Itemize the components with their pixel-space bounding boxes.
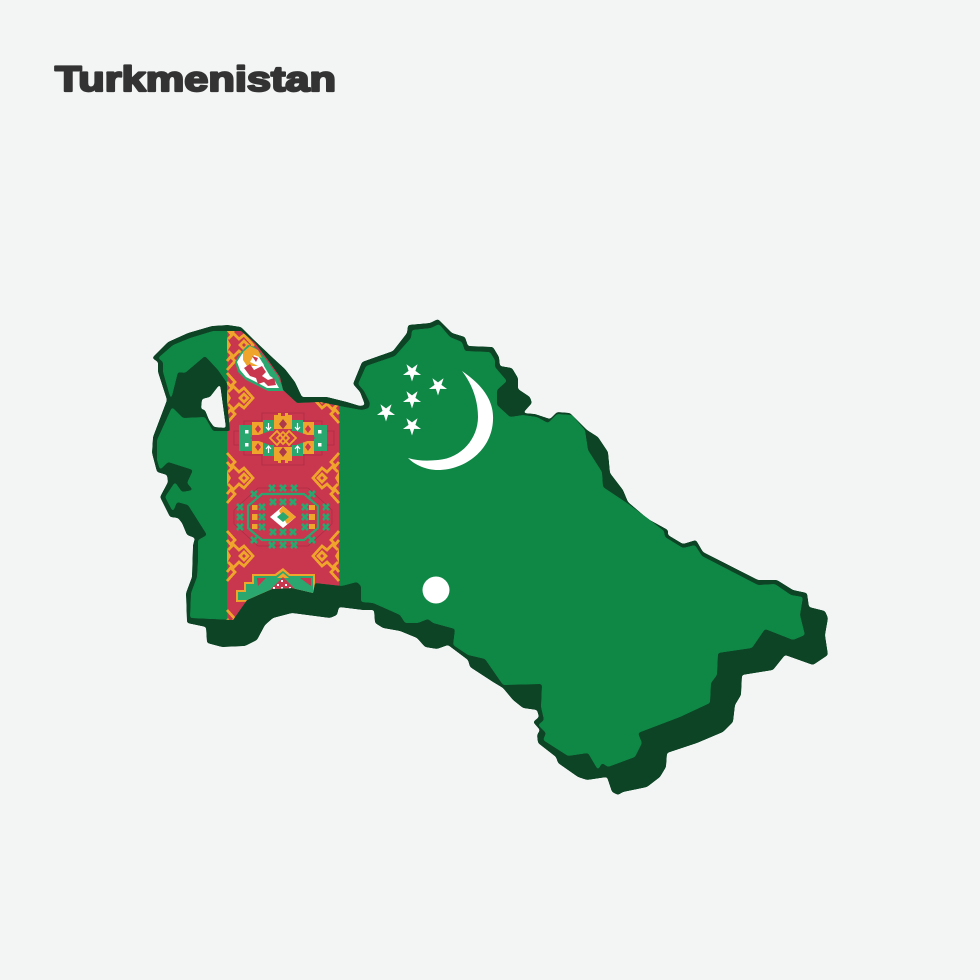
red carpet stripe [226,331,340,620]
green flag field [157,324,805,770]
map of Turkmenistan [152,319,828,795]
carpet gul: upper medallion [234,413,334,465]
five stars [377,364,447,436]
carpet gul: lower medallion [236,568,315,602]
crescent moon [408,371,493,470]
carpet gul: top corner [235,345,284,391]
carpet gul: central medallion [234,485,332,548]
title: Turkmenistan [55,60,336,99]
map outline and drop shadow [152,319,828,795]
carpet hooks along stripe edges [226,331,340,620]
white location dot [422,576,450,604]
caspian bay opening [201,384,226,428]
